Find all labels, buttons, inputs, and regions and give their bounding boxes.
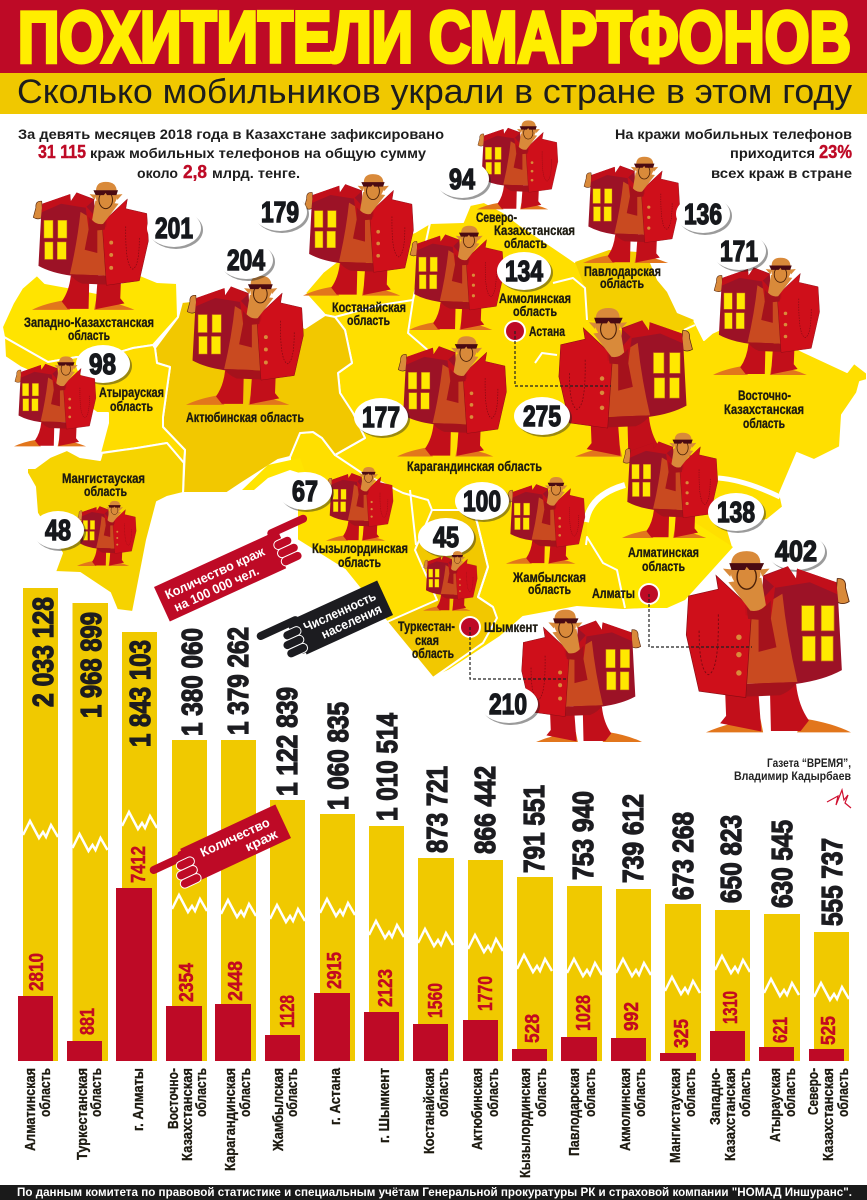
region: Mangystau xyxy=(27,443,184,612)
bar: Shymkent: г. Шымкент xyxy=(376,1068,393,1143)
population and theft bars xyxy=(18,588,852,1178)
region labels: область xyxy=(84,484,127,499)
bar: Akmola oblast: 739 612 xyxy=(618,794,650,883)
bar: West Kazakhstan oblast: 1310 xyxy=(720,991,742,1024)
bar: Almaty oblast: 2 033 128 xyxy=(28,597,60,707)
bar: Zhambyl oblast: Жамбылская xyxy=(270,1068,287,1152)
region: Almaty oblast xyxy=(587,487,733,608)
bar: Pavlodar oblast: 1028 xyxy=(573,995,595,1031)
region labels: Кызылординская xyxy=(312,541,408,556)
thief: Kostanay xyxy=(253,174,413,296)
thief: Turkestan: 45 xyxy=(433,522,459,554)
region borders xyxy=(335,223,780,608)
bar: North Kazakhstan oblast: 555 737 xyxy=(817,838,849,926)
region labels: Шымкент xyxy=(484,620,538,635)
bar: Kostanay oblast: 873 721 xyxy=(422,766,454,853)
bar: Astana: 2915 xyxy=(324,952,346,989)
bar: East Kazakhstan oblast: 1 380 060 xyxy=(177,628,209,736)
bar: Karaganda oblast: Карагандинская xyxy=(222,1068,239,1171)
thief: Zhambyl: 100 xyxy=(463,486,501,518)
thief: Karaganda xyxy=(354,336,506,456)
share of thefts text: всех краж в стране xyxy=(711,166,853,181)
author credit xyxy=(734,756,851,783)
region labels: область xyxy=(338,555,381,570)
callout: thefts per 100000 people: на 100 000 чел. xyxy=(171,563,261,615)
thief: Pavlodar xyxy=(583,157,732,263)
region labels: область xyxy=(528,582,571,597)
bar: Kyzylorda oblast: область xyxy=(533,1068,550,1117)
bar: Almaty oblast: 2810 xyxy=(26,953,48,991)
thief: Almaty city: 402 xyxy=(775,536,817,568)
bar: Almaty city xyxy=(116,632,157,1131)
region: West Kazakhstan xyxy=(2,275,178,362)
bar: Aktobe oblast: область xyxy=(485,1068,502,1117)
share of thefts text xyxy=(615,127,853,181)
region labels: Казахстанская xyxy=(724,402,804,417)
bar: Turkestan oblast: 881 xyxy=(77,1008,99,1035)
bar: Akmola oblast xyxy=(611,794,651,1151)
bar: North Kazakhstan oblast: область xyxy=(835,1068,852,1117)
region labels: Астана xyxy=(529,324,565,339)
bar: Turkestan oblast: область xyxy=(88,1068,105,1117)
bar: Karaganda oblast: 2448 xyxy=(225,961,247,1001)
bar: Almaty city: 1 843 103 xyxy=(125,640,157,747)
thief: Mangystau: 48 xyxy=(45,515,71,547)
bar: Atyrau oblast: Атырауская xyxy=(767,1068,784,1142)
region labels: Алматинская xyxy=(628,545,699,560)
thief: Shymkent xyxy=(480,610,642,742)
thief: Akmola xyxy=(409,226,553,330)
bar: Almaty oblast: Алматинская xyxy=(22,1068,39,1151)
region labels: область xyxy=(642,559,685,574)
region labels: Актюбинская область xyxy=(186,410,304,425)
region labels: Туркестан- xyxy=(398,619,455,634)
bar: Shymkent: 2123 xyxy=(375,969,397,1007)
bar: Pavlodar oblast: 753 940 xyxy=(568,791,600,880)
bar: Akmola oblast: 992 xyxy=(621,1002,643,1031)
marker: Shymkent xyxy=(459,616,481,638)
signature xyxy=(827,790,851,808)
region labels: область xyxy=(412,646,454,661)
bar: Mangystau oblast: Мангистауская xyxy=(667,1068,684,1163)
thief: Shymkent: 210 xyxy=(489,689,527,721)
region labels: область xyxy=(743,416,785,431)
region labels: Карагандинская область xyxy=(407,459,542,474)
intro text: млрд. тенге. xyxy=(212,166,300,181)
bar: Turkestan oblast: Туркестанская xyxy=(74,1068,91,1160)
bar: Almaty oblast xyxy=(18,588,60,1151)
bar: Zhambyl oblast: 1128 xyxy=(277,995,299,1028)
region: Turkestan xyxy=(387,510,497,678)
bar: North Kazakhstan oblast xyxy=(805,838,852,1161)
thief: Atyrau: 98 xyxy=(89,349,116,381)
thief: West Kazakhstan xyxy=(32,182,203,310)
bar: Atyrau oblast xyxy=(759,820,800,1142)
bar: Shymkent: 1 010 514 xyxy=(372,713,404,821)
region: Atyrau xyxy=(4,337,185,463)
share of thefts text: На кражи мобильных телефонов xyxy=(615,127,852,142)
bar: Kostanay oblast xyxy=(413,766,454,1154)
thief: North Kazakhstan: 94 xyxy=(449,164,475,196)
thief: Pavlodar: 136 xyxy=(684,199,722,231)
region labels: Атырауская xyxy=(99,385,164,400)
bar: Kostanay oblast: Костанайская xyxy=(421,1068,438,1154)
bar: North Kazakhstan oblast: Казахстанская xyxy=(820,1068,837,1161)
title banner xyxy=(0,0,867,78)
region labels: область xyxy=(110,399,153,414)
callout: number of thefts: краж xyxy=(243,826,281,854)
bar: Zhambyl oblast: область xyxy=(284,1068,301,1117)
region labels: Казахстанская xyxy=(494,223,575,238)
bar: Karaganda oblast: область xyxy=(237,1068,254,1117)
bar: Zhambyl oblast xyxy=(265,687,305,1152)
thief: Karaganda: 177 xyxy=(362,402,400,434)
thief: East Kazakhstan: 171 xyxy=(720,236,758,268)
bar: Mangystau oblast xyxy=(660,812,701,1163)
region labels: область xyxy=(513,304,557,319)
region labels: Мангистауская xyxy=(62,471,145,486)
bar: Akmola oblast: область xyxy=(632,1068,649,1117)
bar: West Kazakhstan oblast xyxy=(707,815,754,1161)
region: Aktobe xyxy=(155,300,365,493)
bar: West Kazakhstan oblast: Западно- xyxy=(707,1068,724,1125)
bar: East Kazakhstan oblast: Казахстанская xyxy=(179,1068,196,1161)
share of thefts text: приходится xyxy=(730,146,815,161)
bar: Pavlodar oblast xyxy=(561,791,602,1156)
bar: Mangystau oblast: 673 268 xyxy=(668,812,700,900)
bar: Kyzylorda oblast: 791 551 xyxy=(519,785,551,873)
bar: Pavlodar oblast: Павлодарская xyxy=(566,1068,583,1156)
region: Pavlodar xyxy=(575,250,694,330)
marker: Astana xyxy=(504,320,526,342)
thief: Mangystau xyxy=(32,501,136,566)
author credit: Газета “ВРЕМЯ”, xyxy=(767,756,851,770)
thief: Almaty oblast: 138 xyxy=(717,497,755,529)
bar: East Kazakhstan oblast: 2354 xyxy=(176,962,198,1002)
bar: East Kazakhstan oblast: Восточно- xyxy=(165,1068,182,1129)
share of thefts text: 23% xyxy=(819,142,852,162)
map of Kazakhstan xyxy=(2,202,867,678)
thief: Kostanay: 179 xyxy=(261,197,299,229)
thief: Kyzylorda: 67 xyxy=(292,476,318,508)
callout: number of thefts xyxy=(147,804,291,899)
region labels: Жамбылская xyxy=(512,570,586,585)
bar: Aktobe oblast: Актюбинская xyxy=(469,1068,486,1150)
thief: East Kazakhstan xyxy=(712,232,820,375)
region labels: Западно-Казахстанская xyxy=(24,315,154,330)
bar: Akmola oblast: Акмолинская xyxy=(617,1068,634,1151)
thief: Almaty oblast xyxy=(622,433,766,538)
region labels: Алматы xyxy=(592,586,635,601)
subtitle: Сколько мобильников украли в стране в этом году xyxy=(17,73,852,111)
thief: Zhambyl xyxy=(455,477,585,564)
intro text: около xyxy=(137,166,178,181)
bar: Almaty city: г. Алматы xyxy=(130,1068,147,1131)
bar: Aktobe oblast: 1770 xyxy=(475,976,497,1011)
region labels: область xyxy=(68,328,110,343)
bar: Astana: 1 060 835 xyxy=(323,702,355,810)
region labels: область xyxy=(504,236,547,251)
bar: Aktobe oblast: 866 442 xyxy=(470,766,502,854)
thief: Aktobe: 204 xyxy=(227,245,265,277)
bar: Kostanay oblast: область xyxy=(435,1068,452,1117)
bar: East Kazakhstan oblast: область xyxy=(193,1068,210,1117)
bar: Shymkent xyxy=(364,713,404,1143)
subtitle band xyxy=(0,73,867,114)
bar: Mangystau oblast: 325 xyxy=(671,1019,693,1048)
bar: Astana xyxy=(314,702,355,1125)
bar: Kostanay oblast: 1560 xyxy=(425,983,447,1018)
callout: population: Численность xyxy=(301,588,378,634)
bar: North Kazakhstan oblast: 525 xyxy=(818,1016,840,1045)
bar: Karaganda oblast xyxy=(215,627,256,1171)
region labels: Северо- xyxy=(476,210,517,225)
bar: Aktobe oblast xyxy=(463,766,503,1150)
city markers xyxy=(459,320,660,638)
region labels: ская xyxy=(415,633,439,648)
callout: number of thefts: Количество xyxy=(198,814,272,860)
bar: Almaty oblast: область xyxy=(37,1068,54,1117)
region labels xyxy=(24,210,804,661)
callout: population: населения xyxy=(319,601,384,642)
intro text: За девять месяцев 2018 года в Казахстане зафиксировано xyxy=(18,127,444,142)
bar: Karaganda oblast: 1 379 262 xyxy=(223,627,255,735)
thief: Almaty city xyxy=(686,532,851,732)
thief: Turkestan xyxy=(418,518,477,611)
bar: Almaty city: 7412 xyxy=(128,846,150,883)
bar: East Kazakhstan oblast xyxy=(165,628,210,1161)
intro text xyxy=(18,127,444,182)
bar: West Kazakhstan oblast: 650 823 xyxy=(716,815,748,903)
thief: Akmola: 134 xyxy=(505,256,543,288)
thief: West Kazakhstan: 201 xyxy=(155,213,193,245)
thief: Kyzylorda xyxy=(278,467,393,541)
intro text: 2,8 xyxy=(183,162,207,182)
intro text: 31 115 xyxy=(38,142,86,162)
region labels: Восточно- xyxy=(738,388,791,403)
callout: population xyxy=(255,579,393,670)
region labels: Костанайская xyxy=(332,300,406,315)
bar: Turkestan oblast xyxy=(67,603,108,1160)
thief: Astana: 275 xyxy=(523,401,561,433)
marker: Almaty xyxy=(638,583,660,605)
bar: North Kazakhstan oblast: Северо- xyxy=(805,1068,822,1115)
region labels: Акмолинская xyxy=(499,291,571,306)
bar: Mangystau oblast: область xyxy=(682,1068,699,1117)
thief: Atyrau xyxy=(14,345,132,446)
intro text: краж мобильных телефонов на общую сумму xyxy=(90,146,427,161)
author credit: Владимир Кадырбаев xyxy=(734,769,851,783)
region: central and eastern Kazakhstan xyxy=(290,202,867,678)
bar: Atyrau oblast: область xyxy=(782,1068,799,1117)
bar: West Kazakhstan oblast: Казахстанская xyxy=(722,1068,739,1161)
source footer: По данным комитета по правовой статистике и специальным учётам Генеральной прокуратуры РК и страховой компании "НОМАД Иншуранс". xyxy=(17,1187,852,1199)
bar: Zhambyl oblast: 1 122 839 xyxy=(272,687,304,796)
dotted leader lines from cities to thieves xyxy=(470,331,752,679)
callout: thefts per 100000 people xyxy=(152,513,323,622)
region labels: область xyxy=(600,276,644,291)
bar: Turkestan oblast: 1 968 899 xyxy=(76,612,108,718)
thief: Astana xyxy=(514,308,694,457)
thief: Aktobe xyxy=(186,241,303,405)
callout: thefts per 100000 people: Количество краж xyxy=(162,543,268,602)
thief: North Kazakhstan xyxy=(435,120,558,209)
bar: Kyzylorda oblast: 528 xyxy=(522,1014,544,1043)
region labels: Павлодарская xyxy=(584,264,661,279)
bar: Astana: г. Астана xyxy=(327,1067,344,1125)
bar: Pavlodar oblast: область xyxy=(582,1068,599,1117)
bar: Kyzylorda oblast: Кызылординская xyxy=(517,1068,534,1178)
bar: West Kazakhstan oblast: область xyxy=(737,1068,754,1117)
region labels: область xyxy=(347,313,390,328)
bar: Atyrau oblast: 621 xyxy=(770,1017,792,1043)
bar: Atyrau oblast: 630 545 xyxy=(767,820,799,908)
region: Aral shore xyxy=(242,458,306,490)
bar: Kyzylorda oblast xyxy=(512,785,553,1178)
